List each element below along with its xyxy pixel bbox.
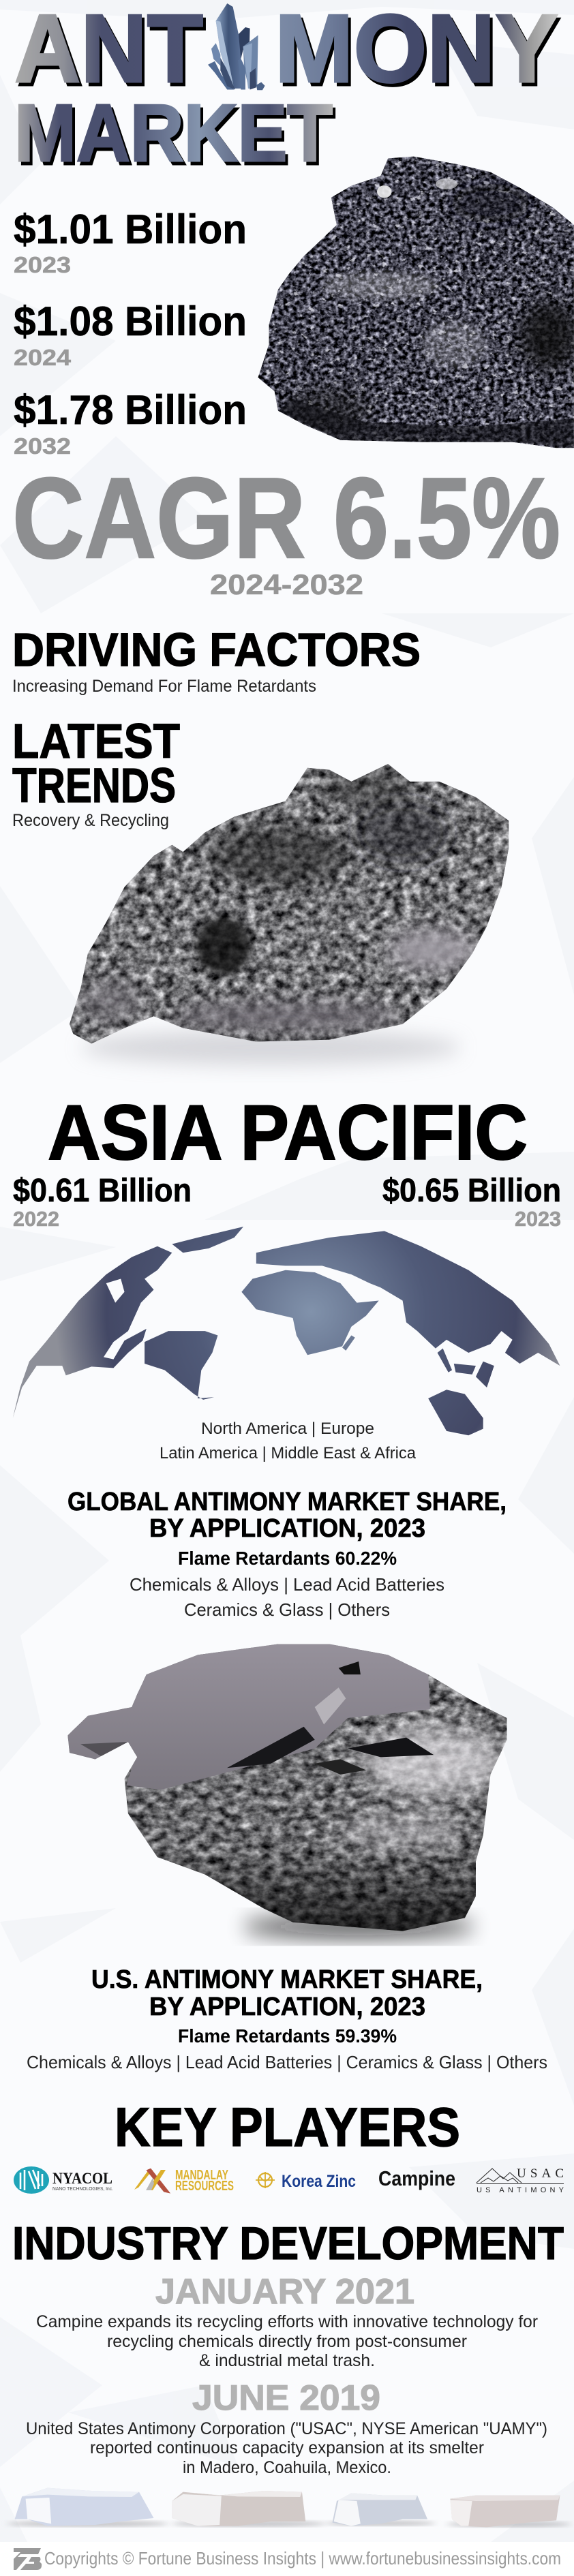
decorative pale rocks row [7,2488,571,2527]
value 2022: 2022 [13,1207,59,1231]
global market share block: Chemicals & Alloys | Lead Acid Batteries [130,1574,444,1595]
title shadow: MONY [277,0,561,106]
Asia Pacific heading and values: ASIA PACIFIC [48,1090,528,1176]
pale rock 2 [172,2491,326,2527]
logo: Mandalay Resources: RESOURCES [175,2179,234,2194]
greenland [172,1227,243,1253]
madagascar [342,1336,355,1351]
icon: Fortune Business Insights logo [14,2548,42,2570]
logo: Campine: Campine [378,2166,455,2190]
logo: USAC US Antimony [477,2166,564,2194]
market value 2032: 2032 [14,433,71,459]
icon: antimony crystal [208,3,265,90]
development: June 2019 [26,2378,547,2477]
pale rock 1 [7,2488,168,2527]
market value 2024: 2024 [14,345,72,370]
logo: Korea Zinc: Korea Zinc [282,2172,356,2191]
title: Antimony Market [14,0,561,182]
value 2022 [13,1173,192,1231]
north america [13,1246,172,1418]
global market share block [67,1488,507,1620]
US market share block: Flame Retardants 59.39% [178,2025,397,2046]
US market share block: Chemicals & Alloys | Lead Acid Batteries | Ceramics & Glass | Others [27,2052,547,2072]
US market share block: BY APPLICATION, 2023 [149,1993,425,2021]
title shadow: MARKET [17,91,335,182]
logo: Korea Zinc [256,2172,356,2191]
australia [428,1390,483,1435]
global market share block: Flame Retardants 60.22% [178,1548,397,1569]
logo: USAC US Antimony: USAC [517,2166,564,2181]
key players heading: KEY PLAYERS [115,2097,460,2158]
title shadow: ANT [17,0,206,106]
rock image: antimony ore [252,153,574,454]
title word MARKET: MARKET [14,88,333,179]
market value 2023 [14,206,247,277]
development: January 2021: & industrial metal trash. [199,2351,375,2370]
driving factors: DRIVING FACTORS [12,624,421,676]
development: June 2019: in Madero, Coahuila, Mexico. [183,2458,391,2477]
value 2023 [382,1173,561,1231]
market value 2024: $1.08 Billion [14,298,247,344]
world map [13,1227,560,1435]
development: June 2019: United States Antimony Corporation ("USAC", NYSE American "UAMY") [26,2419,547,2438]
driving factors [12,624,421,696]
development: January 2021: recycling chemicals directly from post-consumer [107,2332,467,2351]
south america [145,1331,217,1400]
rock image: antimony nugget [66,762,513,1065]
logo: Mandalay Resources [134,2168,234,2194]
latest trends: LATEST [12,715,180,769]
value 2023: 2023 [515,1207,561,1231]
development: January 2021: Campine expands its recycling efforts with innovative technology for [36,2312,538,2331]
CAGR callout: 2024-2032 [210,568,363,600]
Asia Pacific heading and values [13,1090,561,1231]
global market share block: Ceramics & Glass | Others [184,1599,390,1620]
value 2022: $0.61 Billion [13,1173,192,1209]
US market share block [27,1965,547,2072]
logo: USAC US Antimony: US ANTIMONY [477,2186,564,2194]
africa [241,1270,379,1355]
other regions list: Latin America | Middle East & Africa [160,1444,417,1462]
market value 2024 [14,298,247,370]
logo: Mandalay Resources: MANDALAY [175,2168,228,2183]
development: June 2019: reported continuous capacity expansion at its smelter [90,2438,484,2457]
global market share block: BY APPLICATION, 2023 [149,1514,425,1543]
southeast asia islands [438,1349,494,1387]
latest trends: Recovery & Recycling [12,811,169,830]
market value 2032: $1.78 Billion [14,387,247,433]
other regions list: North America | Europe [201,1420,374,1438]
market value 2032 [14,387,247,459]
global market share block: GLOBAL ANTIMONY MARKET SHARE, [67,1488,507,1516]
pale rock 3 [326,2493,436,2526]
value 2023: $0.65 Billion [382,1173,561,1209]
eurasia [256,1231,560,1366]
logos row [14,2166,564,2194]
latest trends [12,715,180,830]
footer: copyright [14,2548,561,2570]
market value 2023: $1.01 Billion [14,206,247,252]
rock image: antimony slab [62,1640,513,1936]
latest trends: TRENDS [12,759,176,813]
development: January 2021 [36,2272,538,2370]
other regions list [160,1420,417,1462]
driving factors: Increasing Demand For Flame Retardants [12,677,316,696]
logo: Nyacol [14,2166,113,2194]
development: June 2019: JUNE 2019 [192,2378,380,2418]
US market share block: U.S. ANTIMONY MARKET SHARE, [91,1965,483,1994]
logo: Nyacol: NYACOL [52,2170,112,2187]
logo: Nyacol: NANO TECHNOLOGIES, Inc. [52,2186,113,2192]
development: January 2021: JANUARY 2021 [155,2272,414,2312]
market value 2023: 2023 [14,252,71,277]
title word ANTIMONY [14,0,558,103]
title shadow [17,0,561,182]
pale rock 4 [447,2496,571,2527]
